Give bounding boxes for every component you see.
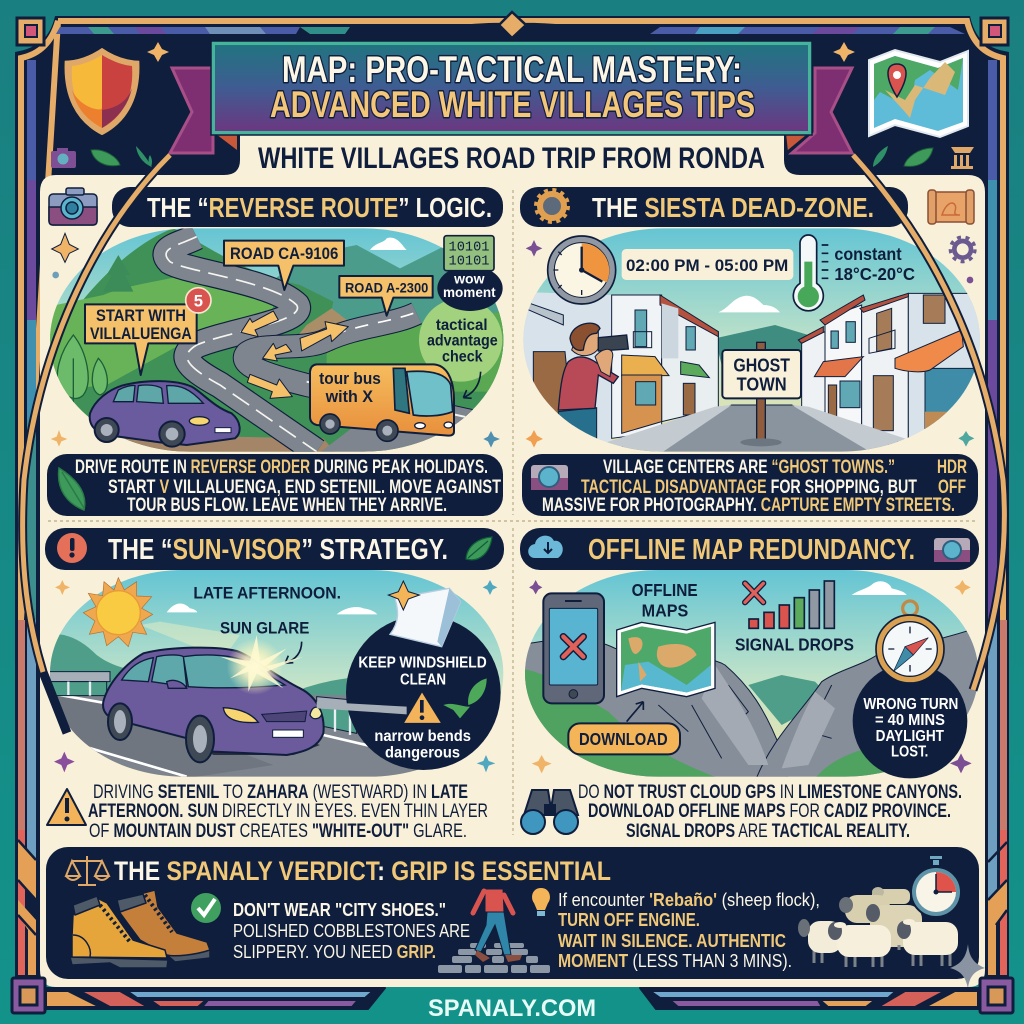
label: road a-2300 bbox=[339, 276, 433, 316]
body text: DOWNLOAD OFFLINE MAPS FOR CADIZ PROVINCE. bbox=[588, 800, 951, 822]
panel: offline map redundancy bbox=[515, 528, 995, 842]
body text: HDR bbox=[937, 456, 967, 478]
panel: reverse route logic bbox=[40, 187, 520, 516]
icon: gear bbox=[950, 237, 975, 262]
body text: DO NOT TRUST CLOUD GPS IN LIMESTONE CANYONS. bbox=[578, 781, 962, 803]
temperature label: 18°C-20°C bbox=[834, 264, 915, 284]
icon: stopwatch bbox=[911, 856, 961, 917]
bus bbox=[310, 364, 454, 441]
sun bbox=[83, 578, 153, 647]
body text bbox=[88, 781, 488, 842]
heading bar bbox=[520, 528, 979, 570]
wrong turn callout: = 40 MINS bbox=[875, 712, 945, 729]
temperature label: constant bbox=[834, 244, 902, 264]
wow moment badge bbox=[437, 266, 503, 311]
icon: leaf right bbox=[904, 148, 933, 166]
panel: sun-visor strategy bbox=[40, 528, 520, 842]
sign: TOWN bbox=[737, 374, 787, 395]
sheep flock bbox=[798, 887, 958, 967]
corner ornament top right bbox=[981, 18, 1008, 45]
icon: alert bbox=[57, 533, 87, 563]
scene: sun glare car bbox=[40, 568, 520, 785]
panel: siesta dead-zone bbox=[515, 187, 995, 516]
icon: small camera bbox=[51, 148, 76, 168]
download button: DOWNLOAD bbox=[579, 729, 668, 749]
keep windshield clean callout: dangerous bbox=[385, 744, 460, 761]
arrows bbox=[241, 311, 348, 398]
icon: temple bbox=[951, 147, 974, 169]
icon: leaf bbox=[59, 468, 85, 510]
heading bar bbox=[520, 187, 908, 227]
tactical advantage check: tactical bbox=[436, 317, 487, 334]
body text: VILLAGE CENTERS ARE “GHOST TOWNS.” bbox=[603, 456, 895, 478]
tactical advantage check bbox=[427, 317, 498, 398]
body text bbox=[578, 781, 962, 842]
icon: boots bbox=[70, 890, 210, 968]
title ribbon right bbox=[785, 68, 852, 153]
phone bbox=[543, 593, 604, 703]
label: start with villaluenga bbox=[85, 304, 197, 375]
icon: sparkle right bbox=[833, 42, 855, 62]
badge 5: 5 bbox=[194, 292, 203, 311]
body text: MASSIVE FOR PHOTOGRAPHY. CAPTURE EMPTY STREETS. bbox=[542, 494, 955, 516]
label: late afternoon: LATE AFTERNOON. bbox=[193, 583, 341, 602]
street bbox=[622, 404, 898, 452]
label: start with villaluenga: VILLALUENGA bbox=[90, 324, 192, 343]
sheep text: MOMENT (LESS THAN 3 MINS). bbox=[558, 950, 792, 971]
body text: AFTERNOON. SUN DIRECTLY IN EYES. EVEN THIN LAYER bbox=[88, 800, 488, 822]
binary chip: 10101 bbox=[449, 241, 489, 256]
time label bbox=[622, 249, 793, 280]
cloud bbox=[852, 581, 907, 595]
gemini-style sparkle bbox=[950, 944, 985, 989]
label: road a-2300: ROAD A-2300 bbox=[345, 279, 429, 295]
download button bbox=[568, 702, 680, 754]
icon: small leaf bbox=[91, 150, 120, 166]
binary chip: 10101 bbox=[449, 254, 489, 269]
clock bbox=[548, 236, 616, 304]
body text: OF MOUNTAIN DUST CREATES "WHITE-OUT" GLARE. bbox=[89, 820, 467, 842]
heading bar bbox=[45, 528, 504, 570]
keep windshield clean callout: CLEAN bbox=[400, 671, 446, 688]
label: start with villaluenga: START WITH bbox=[96, 306, 186, 325]
binary chip bbox=[444, 236, 494, 271]
body text: TACTICAL DISADVANTAGE FOR SHOPPING, BUT bbox=[581, 476, 917, 498]
photographer bbox=[558, 407, 598, 438]
dashed dividers bbox=[48, 190, 978, 835]
car with glare bbox=[103, 635, 324, 762]
signal bars bbox=[749, 581, 834, 628]
left buildings bbox=[524, 292, 612, 444]
icon: warning triangle bbox=[47, 789, 86, 825]
icon: sparkle bbox=[147, 42, 169, 62]
icon: scroll bbox=[928, 190, 974, 224]
icon: bulb bbox=[532, 888, 550, 916]
cloud bbox=[718, 296, 780, 312]
icon: sprig right bbox=[873, 146, 888, 167]
keep windshield clean callout: narrow bends bbox=[374, 728, 471, 745]
thermometer bbox=[793, 235, 828, 311]
tactical advantage check: check bbox=[442, 349, 483, 366]
sheep text bbox=[558, 889, 820, 971]
sign: GHOST bbox=[733, 355, 791, 376]
sheep text: TURN OFF ENGINE. bbox=[558, 909, 700, 930]
keep windshield clean callout bbox=[317, 581, 501, 770]
trees bbox=[57, 335, 88, 405]
footer ornaments left bbox=[45, 988, 385, 1009]
body text bbox=[542, 456, 967, 516]
corner ornament top left bbox=[17, 18, 44, 45]
city shoes text: SLIPPERY. YOU NEED GRIP. bbox=[233, 941, 436, 962]
label: road ca-9106 bbox=[224, 241, 344, 290]
tactical advantage check: advantage bbox=[427, 333, 498, 350]
arrow bbox=[285, 642, 302, 663]
sparkles bbox=[54, 580, 497, 772]
title ribbon left bbox=[170, 68, 238, 153]
car bbox=[90, 381, 240, 447]
heading text: THE “SUN-VISOR” STRATEGY. bbox=[108, 534, 448, 566]
bus: tour bus bbox=[319, 369, 381, 388]
label: sun glare: SUN GLARE bbox=[220, 618, 309, 637]
decorative arches bbox=[23, 155, 1004, 733]
walker on cobblestones bbox=[437, 889, 550, 973]
heading text: OFFLINE MAP REDUNDANCY. bbox=[588, 534, 915, 566]
scene: winding road bbox=[50, 228, 504, 452]
text bar bbox=[47, 454, 503, 516]
tactical blob bbox=[419, 298, 502, 382]
cloud bbox=[370, 238, 407, 250]
wrong turn callout bbox=[853, 664, 967, 778]
label: signal drops: SIGNAL DROPS bbox=[735, 635, 854, 655]
wow moment badge: moment bbox=[443, 284, 496, 300]
footer ornaments right bbox=[640, 988, 980, 1009]
wow moment badge: wow bbox=[453, 270, 485, 286]
time label: 02:00 PM - 05:00 PM bbox=[626, 256, 788, 275]
city shoes text: DON'T WEAR "CITY SHOES." bbox=[233, 899, 446, 920]
icon: map bbox=[869, 50, 968, 137]
compass bbox=[876, 601, 944, 683]
icon: check bbox=[191, 893, 221, 923]
icon: camera bbox=[934, 538, 970, 562]
scene: canyon signal bbox=[515, 568, 995, 782]
sparkles bbox=[51, 233, 500, 448]
heading text: THE SIESTA DEAD-ZONE. bbox=[592, 192, 874, 223]
sign bbox=[722, 342, 801, 446]
title line 1: MAP: PRO-TACTICAL MASTERY: bbox=[282, 49, 742, 90]
wrong turn callout: DAYLIGHT bbox=[876, 728, 945, 745]
temperature label bbox=[834, 244, 915, 284]
body text: DRIVING SETENIL TO ZAHARA (WESTWARD) IN LATE bbox=[93, 781, 468, 803]
body text: START V VILLALUENGA, END SETENIL. MOVE AGAINST bbox=[108, 476, 501, 498]
title line 2: ADVANCED WHITE VILLAGES TIPS bbox=[270, 84, 755, 125]
sparkles bbox=[529, 580, 972, 773]
sparkles bbox=[526, 240, 974, 448]
icon: scales bbox=[66, 856, 109, 885]
body text bbox=[75, 456, 501, 516]
title banner bbox=[211, 41, 812, 135]
body text: TOUR BUS FLOW. LEAVE WHEN THEY ARRIVE. bbox=[127, 494, 447, 516]
sheep text: WAIT IN SILENCE. AUTHENTIC bbox=[558, 930, 786, 951]
label: offline maps: MAPS bbox=[642, 601, 688, 621]
body text: OFF bbox=[938, 476, 966, 498]
sheep text: If encounter 'Rebaño' (sheep flock), bbox=[558, 889, 820, 910]
clouds bbox=[167, 604, 377, 614]
subtitle: WHITE VILLAGES ROAD TRIP FROM RONDA bbox=[258, 142, 765, 175]
red x bbox=[745, 583, 763, 602]
corner ornament bottom left bbox=[12, 978, 45, 1013]
city shoes text: POLISHED COBBLESTONES ARE bbox=[233, 920, 470, 941]
right buildings bbox=[802, 332, 825, 422]
corner ornament bottom right bbox=[980, 978, 1013, 1013]
footer url: SPANALY.COM bbox=[428, 995, 596, 1022]
map bbox=[617, 622, 715, 697]
text bar bbox=[522, 454, 978, 516]
heading bar bbox=[112, 187, 503, 227]
icon: cloud download bbox=[528, 536, 563, 558]
icon: leaf bbox=[466, 537, 492, 560]
icon: shield bbox=[64, 47, 140, 136]
icon: camera bbox=[531, 465, 568, 490]
panel: spanaly verdict bbox=[46, 847, 985, 989]
icon: gear bbox=[536, 190, 568, 222]
scene: ghost town street bbox=[515, 225, 995, 458]
wrong turn callout: LOST. bbox=[891, 744, 928, 761]
cream content panel bbox=[40, 132, 985, 987]
wrong turn callout: WRONG TURN bbox=[863, 696, 958, 713]
city shoes text bbox=[233, 899, 470, 962]
badge 5 bbox=[186, 288, 211, 313]
icon: binoculars bbox=[521, 790, 578, 834]
icon: sprig bbox=[136, 146, 152, 167]
bus: with X bbox=[325, 387, 373, 406]
top diamond ornament bbox=[360, 12, 664, 38]
label: offline maps bbox=[632, 580, 698, 621]
keep windshield clean callout: KEEP WINDSHIELD bbox=[358, 654, 487, 671]
label: offline maps: OFFLINE bbox=[632, 580, 698, 600]
body text: DRIVE ROUTE IN REVERSE ORDER DURING PEAK HOLIDAYS. bbox=[75, 456, 488, 478]
heading text: THE “REVERSE ROUTE” LOGIC. bbox=[147, 192, 492, 223]
label: road ca-9106: ROAD CA-9106 bbox=[230, 244, 338, 263]
icon: camera bbox=[49, 188, 97, 225]
verdict heading: THE SPANALY VERDICT: GRIP IS ESSENTIAL bbox=[114, 856, 611, 886]
body text: SIGNAL DROPS ARE TACTICAL REALITY. bbox=[626, 820, 910, 842]
